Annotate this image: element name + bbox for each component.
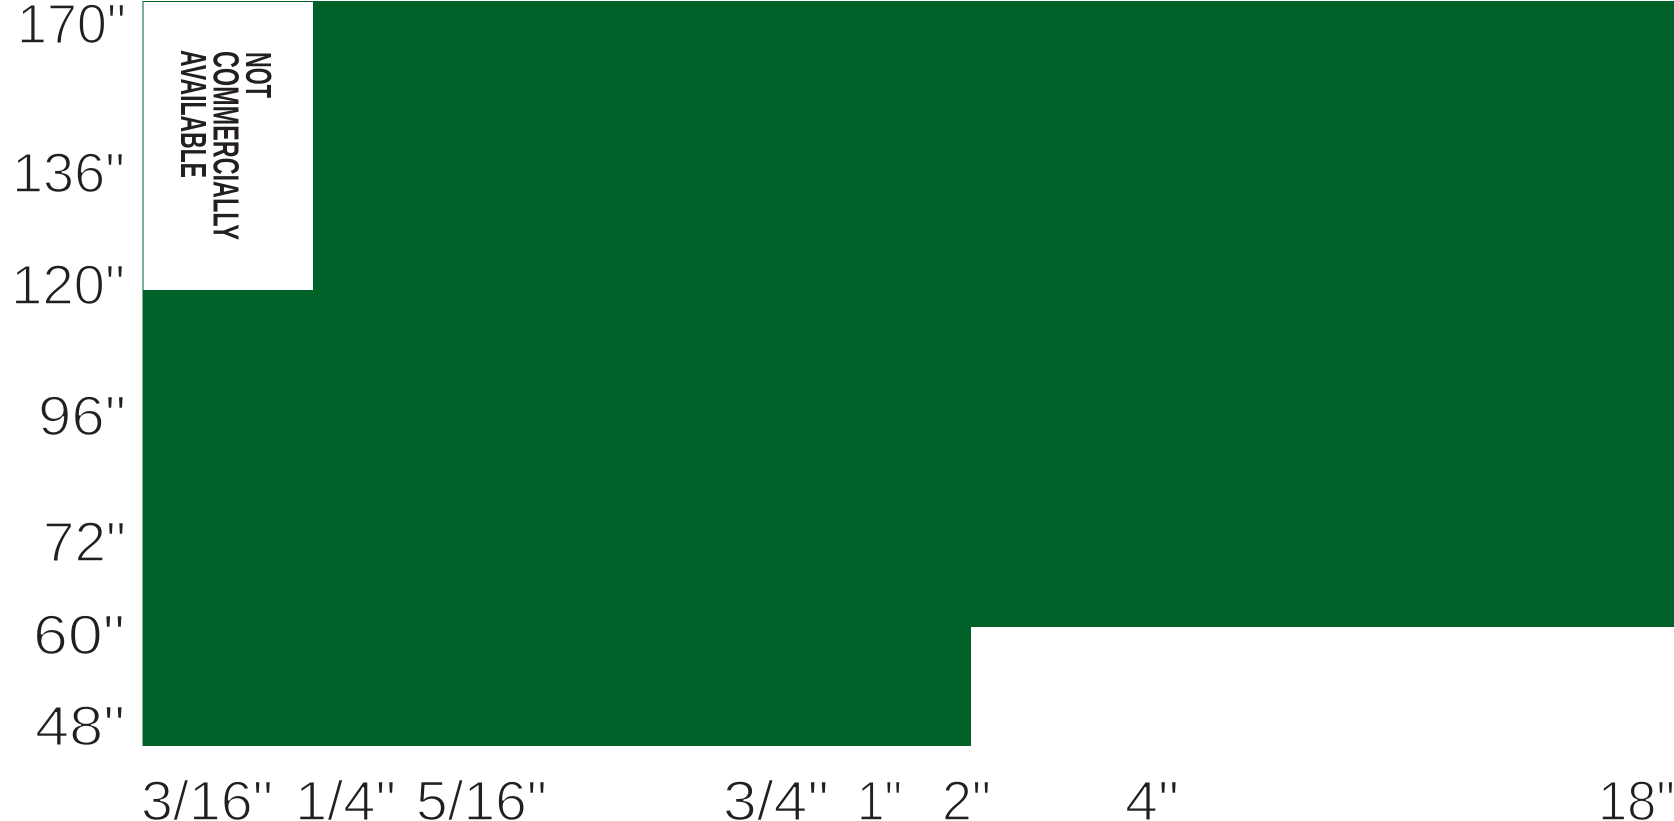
y axis labels: 72"	[43, 510, 126, 573]
label: not commercially available: COMMERCIALLY	[206, 51, 246, 240]
label: not commercially available: AVAILABLE	[173, 50, 214, 178]
panel: not commercially available	[144, 2, 313, 290]
label: not commercially available: NOT	[238, 52, 279, 98]
y axis labels: 96"	[38, 384, 126, 447]
y axis labels: 60"	[33, 603, 125, 666]
y axis labels: 136"	[12, 141, 125, 204]
y axis labels: 120"	[11, 253, 125, 316]
label: not commercially available	[173, 50, 279, 240]
y axis labels: 48"	[35, 694, 125, 757]
y axis labels	[11, 0, 126, 757]
x axis labels	[141, 769, 1674, 821]
